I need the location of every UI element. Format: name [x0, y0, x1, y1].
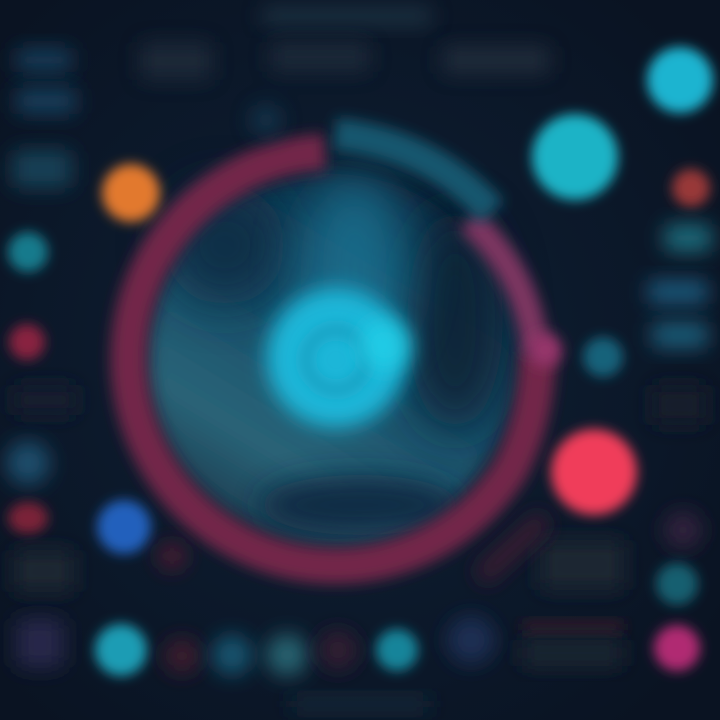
icon: teal dot lower	[656, 563, 698, 605]
text block right	[442, 46, 550, 74]
text block dark	[14, 385, 76, 415]
icon: large cyan dot	[532, 114, 618, 200]
icon: red dot	[672, 169, 710, 207]
text block grey lines	[522, 640, 622, 666]
small teal marker	[250, 104, 282, 136]
icon: teal dot	[376, 629, 418, 671]
icon: teal dot	[8, 232, 48, 272]
icon: magenta dot	[654, 625, 700, 671]
centre highlight	[359, 319, 411, 371]
icon: blue-teal dot	[212, 635, 252, 675]
icon: dim red dot	[8, 502, 48, 534]
text block purple	[16, 618, 64, 668]
ring marker	[528, 333, 562, 367]
icon: large red dot	[551, 429, 637, 515]
text block left	[140, 42, 212, 80]
pink ring arc, upper right	[470, 220, 536, 352]
text block blue 2	[652, 322, 708, 348]
text block dark	[652, 385, 706, 425]
icon: orange dot	[102, 164, 160, 222]
disk upper-left shadow	[165, 185, 285, 305]
panel: bottom row	[16, 616, 624, 711]
text block teal	[664, 224, 712, 252]
icon: large cyan dot top right	[647, 47, 713, 113]
disk upper-right shadow	[407, 210, 503, 430]
text block red lines	[522, 622, 624, 632]
text block blue 1	[16, 48, 72, 72]
icon: grey-teal dot	[266, 634, 308, 676]
text block blue 1	[648, 280, 708, 304]
icon: red dot	[9, 324, 45, 360]
text block centre	[270, 42, 370, 72]
panel: central circular chart	[128, 134, 562, 566]
centre glow core ring	[306, 330, 366, 390]
icon: small dark red dot	[158, 542, 186, 570]
heading	[262, 6, 432, 26]
icon: dark red dot	[164, 638, 200, 674]
text block grey	[540, 540, 624, 590]
icon: blue dot	[97, 500, 151, 554]
crimson ring arc	[128, 152, 538, 566]
icon: dim blue dot	[447, 616, 495, 664]
centre glow	[266, 288, 406, 428]
text block grey	[14, 550, 74, 592]
panel: top text blocks	[140, 42, 550, 136]
arc stub	[480, 518, 545, 578]
panel: left column	[6, 48, 186, 592]
inner disk	[146, 174, 518, 546]
icon: dim purple dot	[664, 511, 702, 549]
text block blue 2	[16, 88, 76, 114]
icon: dim blue dot	[6, 441, 50, 485]
icon: teal dot	[583, 337, 623, 377]
disk centre teal haze	[300, 175, 410, 365]
footer text bar	[290, 697, 430, 711]
disk lower shadow	[260, 475, 460, 535]
icon: dim red dot	[318, 630, 358, 670]
text block teal	[12, 150, 72, 188]
teal ring arc, top	[335, 134, 492, 212]
panel: right column	[480, 47, 713, 671]
icon: cyan dot	[95, 624, 147, 676]
